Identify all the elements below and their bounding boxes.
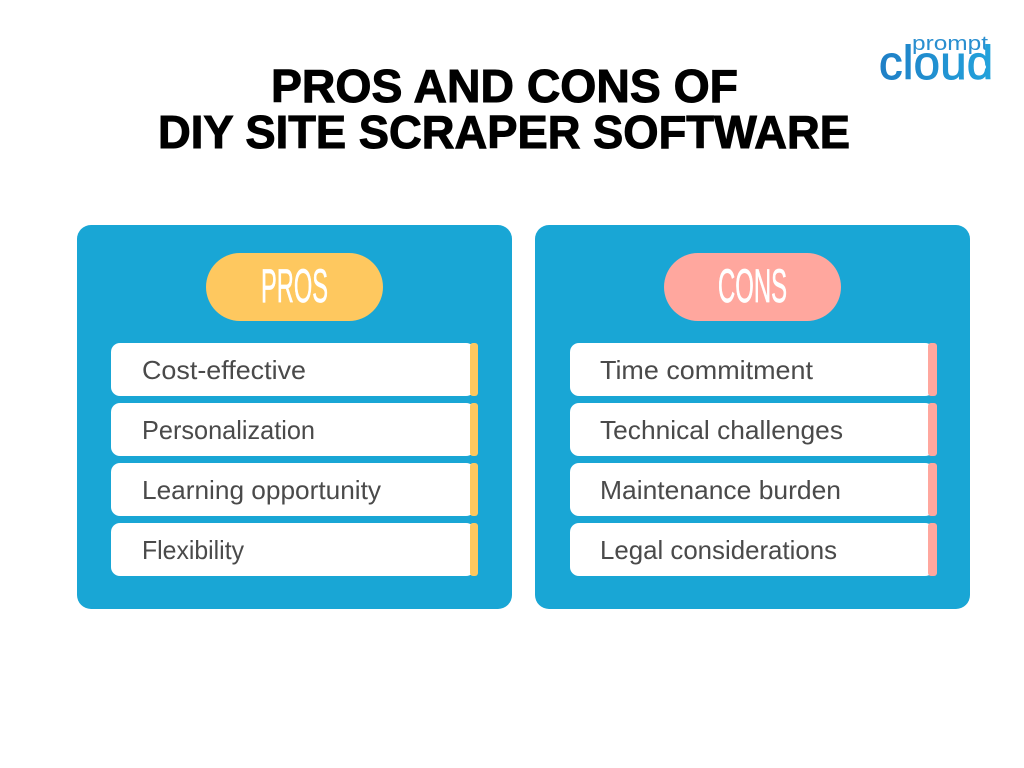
cons item: time commitment: Time commitment — [600, 355, 814, 385]
cons heading pill: CONS — [718, 259, 787, 312]
panel: cons — [535, 225, 970, 609]
logo: PromptCloud: prompt — [912, 33, 989, 55]
title — [158, 60, 850, 158]
cons item: legal considerations — [570, 523, 937, 576]
pros item: cost-effective: Cost-effective — [142, 355, 306, 385]
pros item: learning opportunity — [111, 463, 478, 516]
cons item: technical challenges: Technical challenges — [600, 415, 843, 445]
cons item: time commitment — [570, 343, 937, 396]
pros item: flexibility: Flexibility — [142, 535, 244, 565]
pros item: personalization: Personalization — [142, 415, 315, 445]
panel: pros — [77, 225, 512, 609]
logo: PromptCloud: cloud — [879, 36, 993, 89]
pros item: cost-effective — [111, 343, 478, 396]
cons item: maintenance burden — [570, 463, 937, 516]
pros item: personalization — [111, 403, 478, 456]
pros item: learning opportunity: Learning opportunity — [142, 475, 381, 505]
pros heading pill — [206, 253, 383, 321]
title: PROS AND CONS OF — [271, 60, 738, 112]
cons item: technical challenges — [570, 403, 937, 456]
cons heading pill — [664, 253, 841, 321]
cons item: legal considerations: Legal considerations — [600, 535, 837, 565]
pros heading pill: PROS — [261, 259, 328, 312]
pros item: flexibility — [111, 523, 478, 576]
cons item: maintenance burden: Maintenance burden — [600, 475, 841, 505]
title: DIY SITE SCRAPER SOFTWARE — [158, 106, 850, 158]
